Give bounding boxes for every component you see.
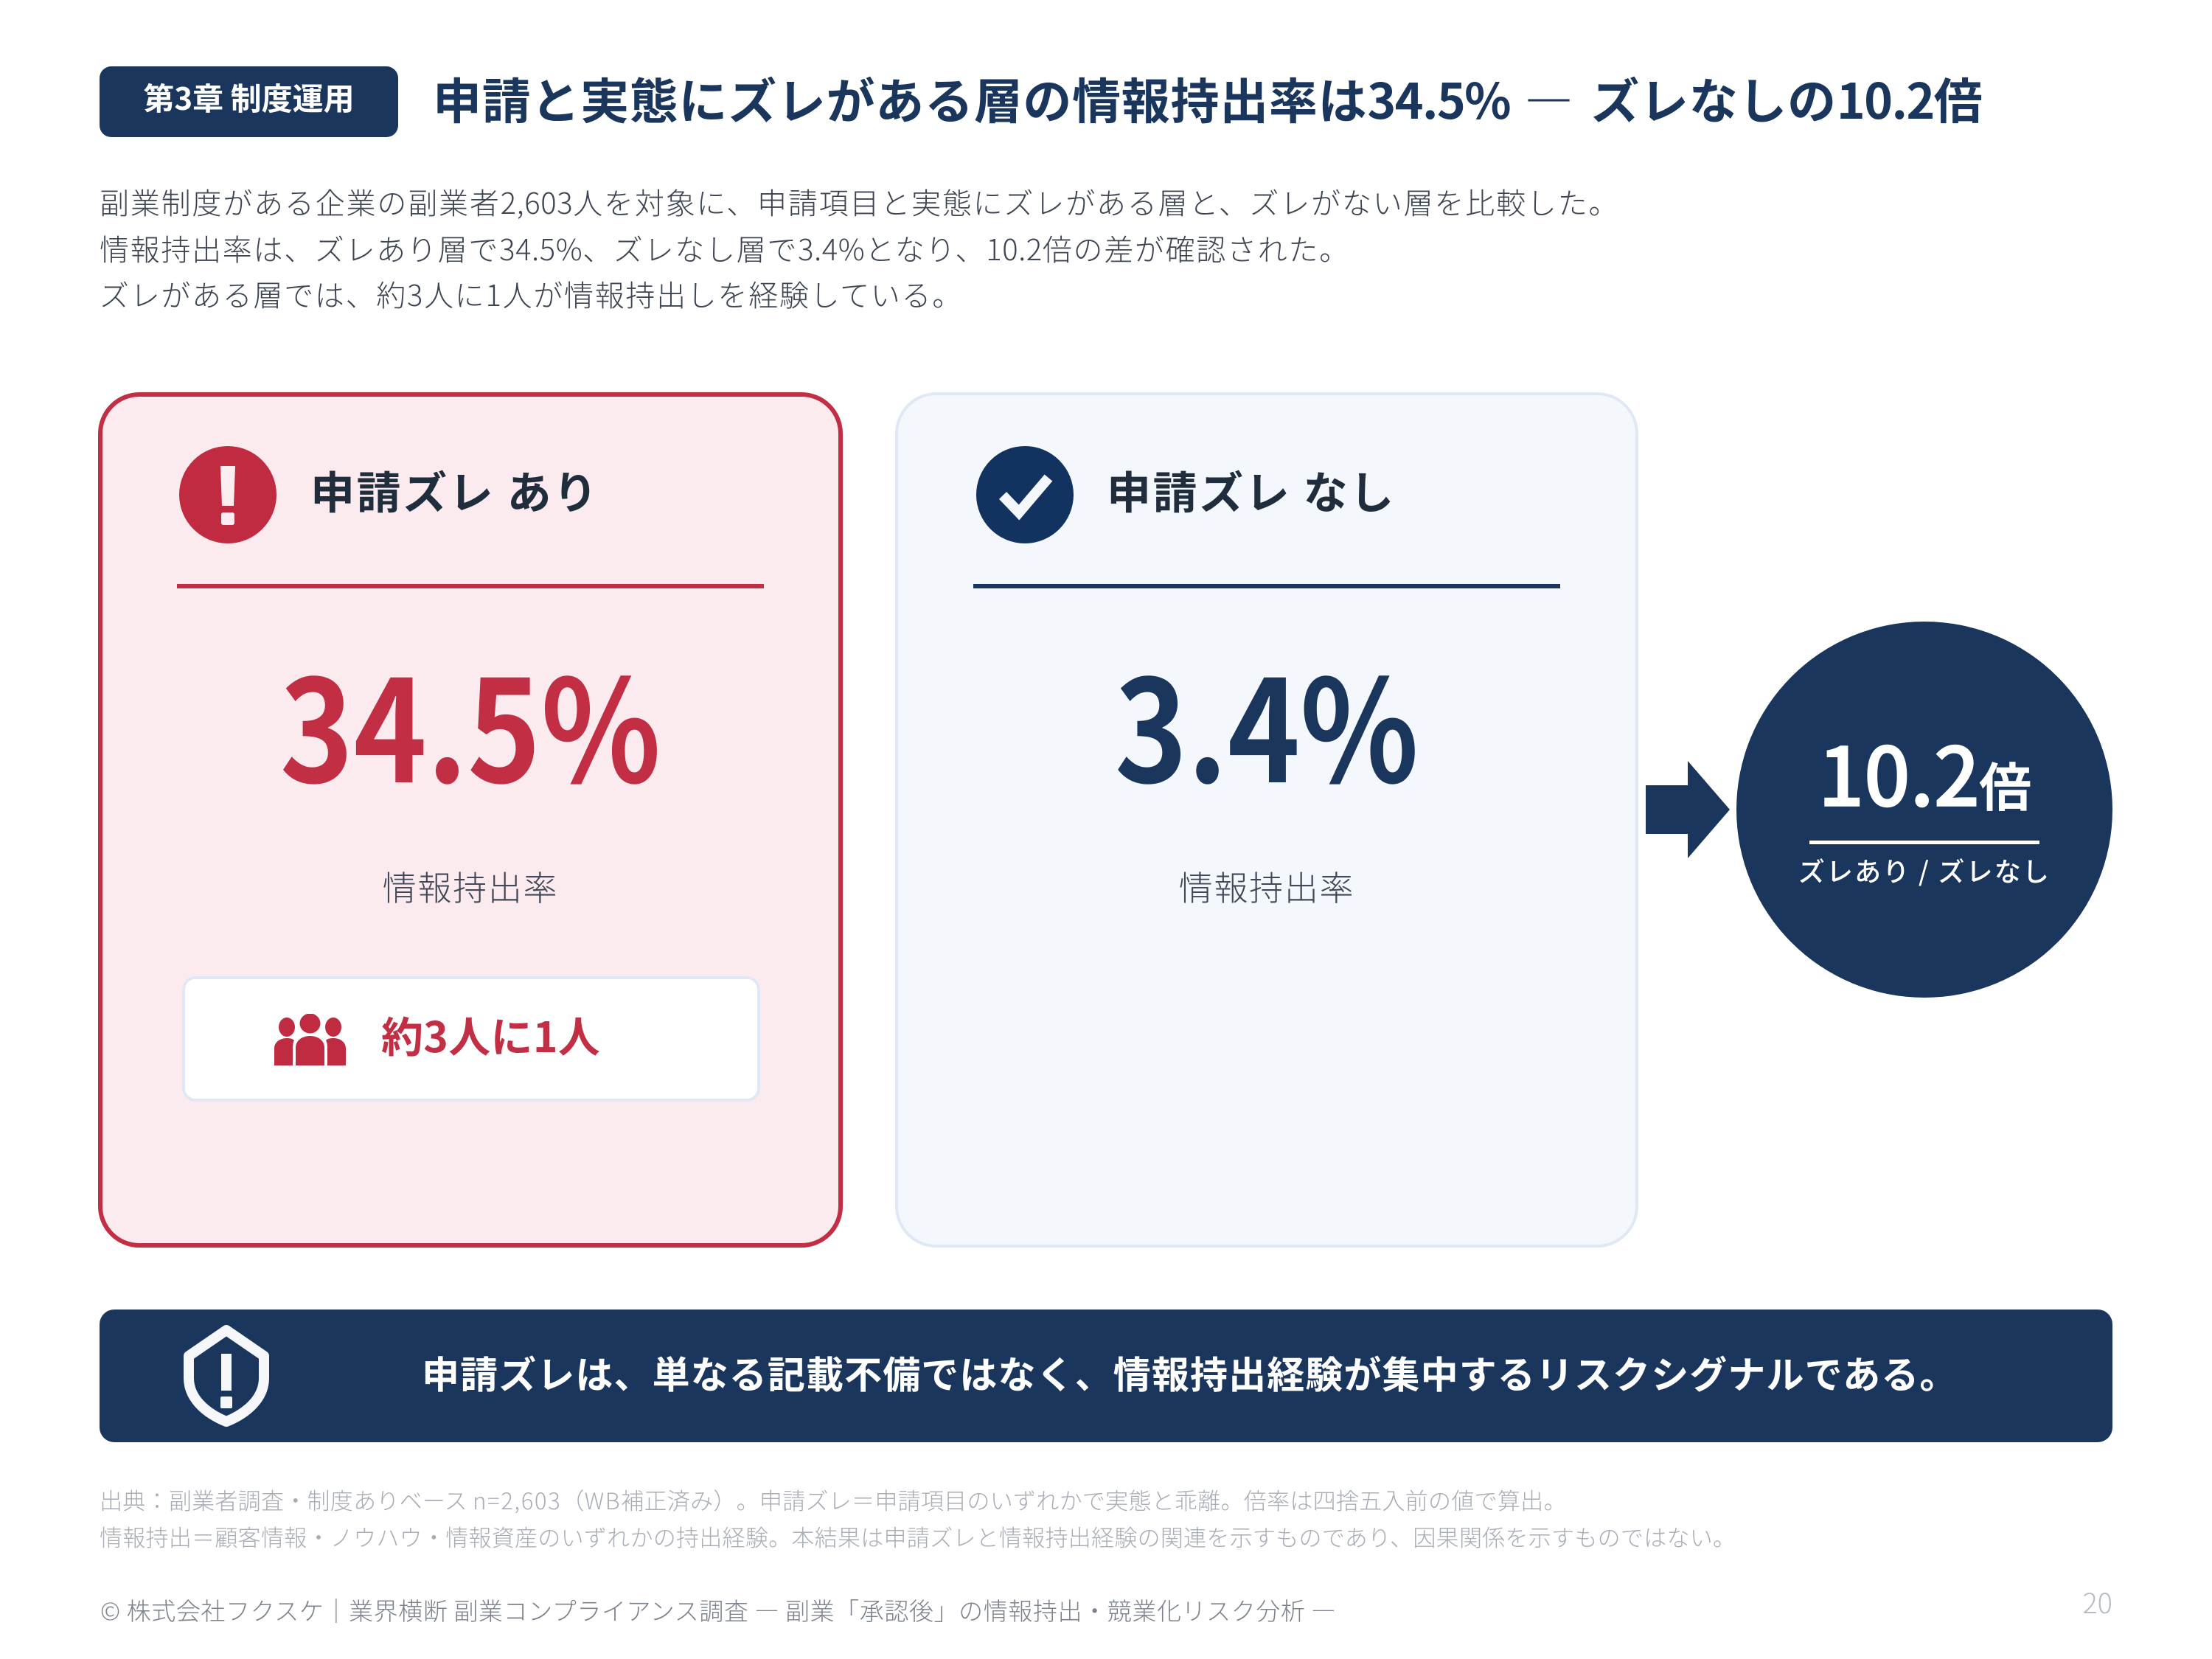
ratio value: 10.2倍 bbox=[1818, 712, 2031, 830]
intro text: ズレがある層では、約3人に1人が情報持出しを経験している。 bbox=[100, 272, 963, 315]
heading: without discrepancy: 申請ズレ なし bbox=[1107, 458, 1396, 522]
chapter badge bbox=[100, 66, 398, 137]
label: information leakage rate: 情報持出率 bbox=[1179, 862, 1354, 911]
arrow bbox=[1646, 761, 1730, 858]
conclusion text: 申請ズレは、単なる記載不備ではなく、情報持出経験が集中するリスクシグナルである。 bbox=[422, 1345, 1958, 1399]
value: 34.5%: 34.5% bbox=[280, 619, 661, 824]
callout text: 約3人に1人 bbox=[381, 1004, 600, 1065]
icon: navy check bbox=[976, 446, 1074, 543]
ratio label: ズレあり / ズレなし bbox=[1798, 851, 2051, 889]
conclusion banner bbox=[100, 1310, 2112, 1442]
callout: one in three bbox=[182, 976, 760, 1102]
icon: people bbox=[274, 1014, 346, 1065]
ratio rule bbox=[1809, 841, 2039, 844]
icon: shield bbox=[184, 1325, 269, 1427]
panel: with discrepancy bbox=[98, 392, 843, 1248]
ratio circle bbox=[1736, 622, 2112, 998]
page number: 20 bbox=[2082, 1581, 2112, 1621]
label: information leakage rate: 情報持出率 bbox=[383, 862, 558, 911]
intro text bbox=[100, 180, 1619, 315]
icon: red alert bbox=[179, 446, 276, 543]
title: 申請と実態にズレがある層の情報持出率は34.5% — ズレなしの10.2倍 bbox=[433, 63, 1983, 133]
panel: without discrepancy bbox=[895, 392, 1638, 1248]
heading: with discrepancy: 申請ズレ あり bbox=[310, 458, 599, 522]
chapter badge: 第3章 制度運用 bbox=[143, 74, 355, 119]
divider navy bbox=[973, 584, 1560, 588]
divider red bbox=[177, 584, 764, 588]
source notes: 情報持出＝顧客情報・ノウハウ・情報資産のいずれかの持出経験。本結果は申請ズレと情報持出経験の関連を示すものであり、因果関係を示すものではない。 bbox=[100, 1520, 1736, 1553]
source notes: 出典：副業者調査・制度ありベース n=2,603（WB補正済み）。申請ズレ＝申請項目のいずれかで実態と乖離。倍率は四捨五入前の値で算出。 bbox=[100, 1483, 1567, 1516]
intro text: 情報持出率は、ズレあり層で34.5%、ズレなし層で3.4%となり、10.2倍の差が確認された。 bbox=[100, 226, 1350, 268]
value: 3.4%: 3.4% bbox=[1115, 619, 1419, 824]
source notes bbox=[100, 1483, 1736, 1553]
copyright: © 株式会社フクスケ｜業界横断 副業コンプライアンス調査 — 副業「承認後」の情報持出・競業化リスク分析 — bbox=[100, 1592, 1336, 1627]
intro text: 副業制度がある企業の副業者2,603人を対象に、申請項目と実態にズレがある層と、ズレがない層を比較した。 bbox=[100, 180, 1619, 223]
